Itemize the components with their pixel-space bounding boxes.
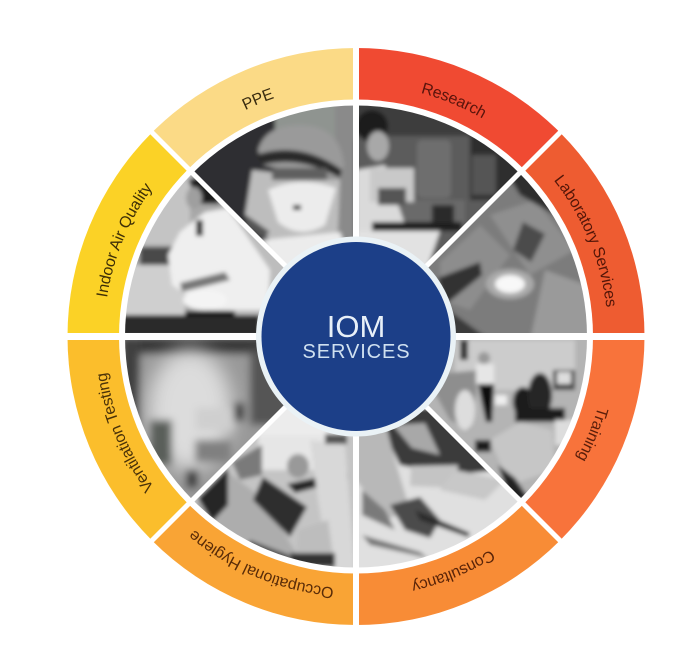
label: Ventilation Testing: Ventilation Testing [98,373,152,494]
centre hub [256,236,456,436]
label: Indoor Air Quality: Indoor Air Quality [96,183,152,296]
photo: Research laboratory [359,106,518,264]
photo: Ventilation Testing [125,340,284,498]
label: Occupational Hygiene: Occupational Hygiene [190,531,333,598]
segment: Laboratory Services [525,134,644,333]
segment: Consultancy [359,506,558,625]
white dividers between segments [50,40,660,633]
label: Training: Training [575,410,608,462]
photo: Consultancy desk [359,409,518,568]
photo: Training room [428,340,587,498]
photo: Laboratory Services [428,175,587,333]
segment: Research [359,48,558,168]
segment: Training [525,340,644,539]
segment: Indoor Air Quality [68,134,187,333]
label: Research: Research [422,82,485,118]
segment: PPE [154,48,353,168]
photo: Occupational Hygiene [194,409,353,568]
photo: PPE face shield and mask [194,106,353,264]
white separator ring [119,100,593,574]
segment: Occupational Hygiene [154,506,353,625]
segment: Ventilation Testing [68,340,187,539]
centre subtitle: SERVICES: SERVICES [303,341,410,363]
photo wheel [120,100,600,575]
outer ring of eight coloured segments [56,36,656,637]
segment labels on circular path [96,82,614,598]
centre title: IOM: IOM [327,309,385,344]
photo: Indoor Air Quality [125,175,284,333]
label: Laboratory Services: Laboratory Services [554,174,614,307]
label: Consultancy: Consultancy [413,552,494,591]
label: PPE: PPE [242,88,274,110]
